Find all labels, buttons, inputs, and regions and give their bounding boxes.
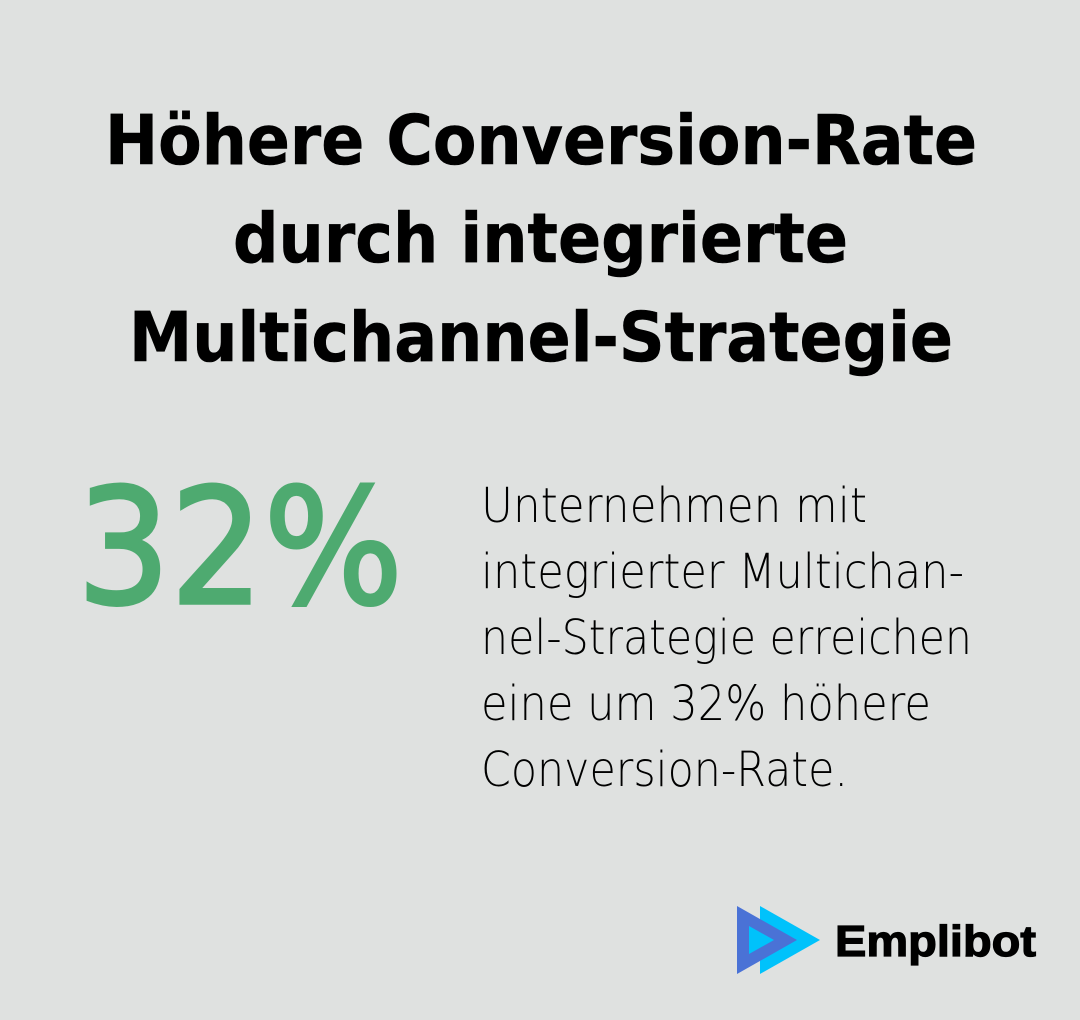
- title: durch integrierte: [233, 199, 848, 279]
- title: Multichannel-Strategie: [129, 298, 953, 378]
- title: [105, 101, 977, 378]
- icon: play triangles: [737, 906, 820, 974]
- description text: Unternehmen mit: [481, 478, 867, 534]
- description text: [481, 478, 972, 798]
- logo: Emplibot: [737, 906, 1036, 974]
- big stat: 32%: 32%: [77, 454, 403, 641]
- description text: nel-Strategie erreichen: [481, 610, 972, 666]
- description text: Conversion-Rate.: [481, 742, 848, 798]
- title: Höhere Conversion-Rate: [105, 101, 977, 181]
- description text: integrierter Multichan-: [481, 544, 964, 600]
- description text: eine um 32% höhere: [481, 676, 931, 732]
- logo wordmark: Emplibot: [835, 917, 1036, 966]
